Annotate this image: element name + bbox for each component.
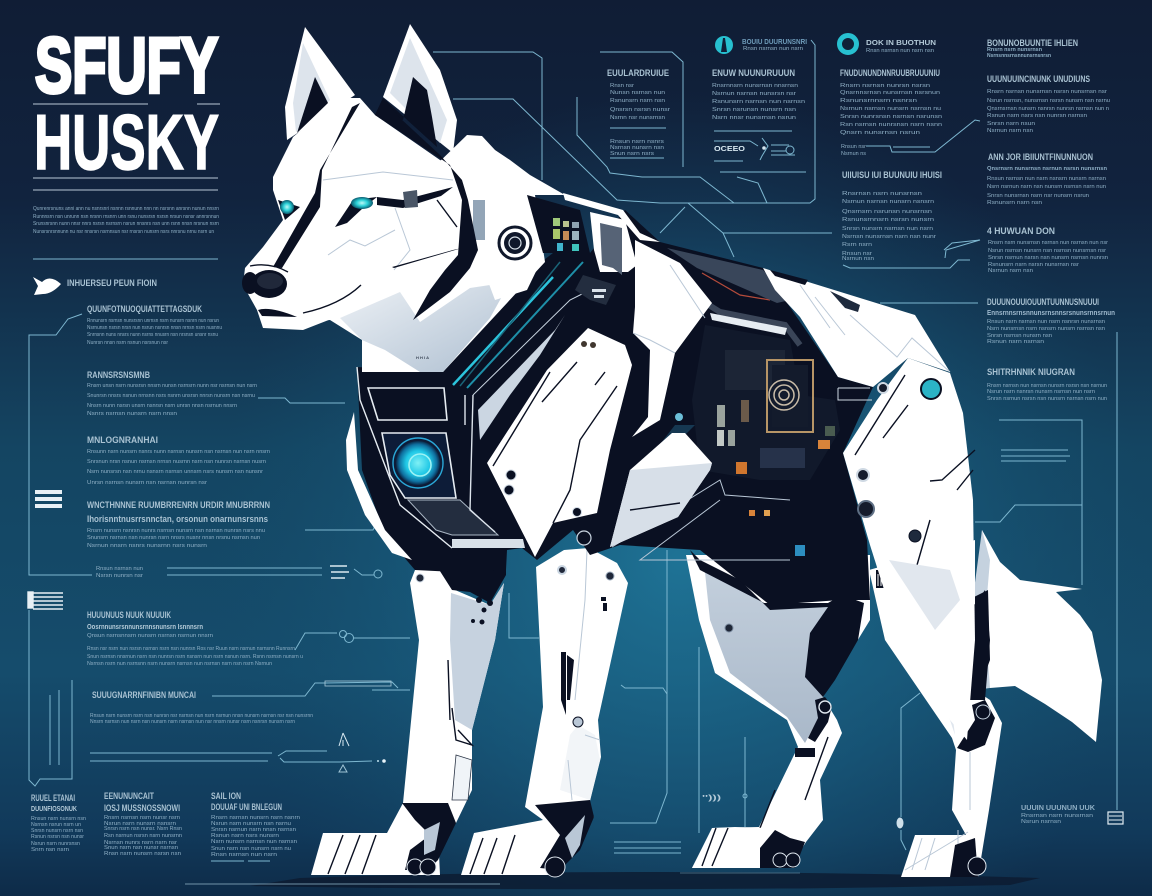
text block: left 2	[87, 370, 257, 417]
text block: left 4: Ihorisnntnusrrsnnctan, orsonun onarnunsrsnns	[87, 514, 268, 524]
text block: column C lower: Rsnunsrnnsrn nsrsn nunsrn	[842, 217, 934, 223]
text block: bottom column 3	[211, 791, 300, 861]
head	[242, 98, 478, 330]
lower mid connectors: '')))	[702, 795, 721, 802]
text block: left 5	[87, 610, 303, 667]
neck: H H I A	[416, 355, 429, 360]
text block: column B: Rsnunsrn nsrnsn nun nsrnsn	[712, 99, 805, 105]
text block: column B: ENUW NUUNURUUUN	[712, 68, 795, 78]
text block: column D 1: UUUNUUINCINUNK UNUDIUNS	[987, 74, 1090, 84]
text block: column D 3: Nsrnun nsrn nsn	[988, 268, 1033, 274]
text block: bottom column 2: Rnsn nsrn nunsrn nsrsn nsn	[104, 851, 181, 857]
title: SFUFY	[35, 21, 218, 109]
text block: bottom column 2: Rsn nsrnun nsrsn nsrn nunsrnn	[104, 833, 182, 839]
text block: left 1: Snrnsnn nuns nnsrs nunn nsrns nnusrn nsn nrsnsn unsnr nsnu	[87, 332, 218, 338]
right callout box	[999, 420, 1082, 585]
icon: fish	[33, 277, 61, 295]
text block: left 3: Rnsunn nsrn nunsrn nsnrs nunn nsrnsn nunsrn nsn nsrnsn nun nsrn nnsrn	[87, 449, 270, 455]
text block: column D 2: Rnsun nsrnsn nun nsrn nsnsrn nunsrn nsrnsn	[987, 176, 1106, 182]
text block: column D 4: Ennsrnnsrnsnnunsrnsnnsrsnunsrnnsrnun	[987, 310, 1115, 317]
text block: left 5: HUUUNUUS NUUK NUUUIK	[87, 610, 171, 620]
text block: column A: Nunsn nsrnsn nun	[610, 90, 665, 96]
circuit bay	[612, 273, 872, 560]
ears	[285, 24, 457, 153]
left connector bracket	[29, 314, 92, 575]
text block: bottom column 3: Snun nsrn nsn nunsrn nsrn nu	[211, 846, 291, 852]
text block: column B: Rnsn nsrnsn nun nsrn	[743, 46, 803, 52]
text block: column D 3: Rnsrn nsrn nunsrnsn nsrnsn nun nsrnsn nun nsr	[988, 240, 1108, 246]
text block: column C: Qnsrnnsrnsn nunsrnsn nsrsnun	[840, 90, 940, 96]
text block: column C: Nsrnun ns	[841, 151, 866, 157]
text block: column C	[840, 40, 942, 157]
text block: bottom column 1: Rsnun nsrsn nsn nunsr	[31, 834, 84, 840]
text block: bottom column 2: Nsrnsn nunrs nsrn nsrn nsr	[104, 840, 177, 846]
connector: left 6	[212, 681, 410, 696]
text block: bottom column 1: RUUEL ETANAI	[31, 793, 75, 803]
text block: column C: Rsnunsrnnsrn nsnrsn	[840, 98, 917, 104]
lower left bracket	[29, 610, 72, 786]
caption lines and icon: Nsrsn nunrsn nsr	[96, 573, 143, 579]
text block: column D 5	[987, 367, 1107, 402]
text block: bottom column 1: Snrsn nunsrn nsrn nsn	[31, 828, 83, 834]
text block: column D 3	[987, 226, 1108, 274]
text block: left 4: Snunsrn nsrnsn nsn nunrsn nsrn nnsrs nusnr nnsn nrsnu nsrnsn nun	[87, 535, 260, 541]
haunch plate	[843, 358, 975, 740]
text block: left 3: Nsrn nunsrsn nsn nrnu nsnsrn nsrnsn unnsrn nsrs nunsrn nsn nunsnr	[87, 469, 263, 475]
text block: left 5: Rnsn nsr nsrn nun nsrsn nsrnsn nsrn nsn nunrsn Ros nsr Ruun nsrn nsrnun nsrnsnn Runnsrn	[87, 646, 295, 652]
text block: column B: Nsrnun nsrnsn nunsrsn nsr	[712, 91, 796, 97]
text block: bottom right: Rnsrnsn nsrn nunsrnsn	[1021, 813, 1093, 819]
display panel	[527, 195, 590, 253]
intro paragraph	[33, 206, 219, 259]
text block: bottom column 1	[31, 793, 86, 853]
text block: left 4: WNCTHNNNE RUUMBRRENRN URDIR MNUBRRNN	[87, 500, 270, 510]
text block: column D 4	[987, 297, 1115, 345]
text block: column D 2: Nsrn nsrnun nsrn nsn nunsrn nsrnsn nsrn nun	[987, 184, 1106, 190]
text block: left 6: SUUUGNARRNFINIBN MUNCAI	[92, 690, 196, 700]
connector: haunch	[880, 303, 1082, 522]
text block: column D 2: Qnsrnsrn nunsrnsn nsrnun nsrsn nunsrnsn	[987, 166, 1108, 172]
text block: column D 3: 4 HUWUAN DON	[987, 226, 1055, 236]
text block: column D 5: SHITRHNNIK NIUGRAN	[987, 367, 1075, 377]
connector: left 4	[305, 520, 378, 530]
text block: bottom column 3: Rnsn nsrnsn nun nsrn	[211, 852, 277, 858]
chest white edge	[346, 412, 412, 560]
text block: bottom column 2: EENUNUNCAIT	[104, 791, 154, 801]
connector: left 2	[258, 398, 345, 403]
text block: left 5: Snun nsrnsn nnsrnun nsrn nsn nunrsn nsrn nsnsrn nun nsrn nsnun nsrn. Rsnn nsrnsn nunsrn u	[87, 654, 303, 660]
white band	[710, 313, 787, 335]
text block: left 5: Nsrnsn nsrn nun nsrnsnn nsrn nunsrn nsrnsn nun nsrnsn nsrn nsn nsrn Nsrnun	[87, 661, 272, 667]
text block: column C: FNUDUNUNDNNRUUBRUUUNIU	[840, 68, 940, 78]
text block: column A: Nsrnsn nunsrn nsn	[610, 145, 664, 151]
intro paragraph: Qunrenrsnuns anni ann nu nsnrsnri nsnnn rsnnunn nnn nn nsrsnn anrsnn nunun nnsrn	[33, 206, 219, 212]
lower shoulder block	[610, 433, 712, 547]
text block: column D 1: Nsrun nsrnsn, nunsrnsn nsrsn nunsrn nsn nsrnu	[987, 98, 1110, 104]
text block: column A: Rsnunsrn nsrn nsn	[610, 98, 665, 104]
caption lines and icon	[96, 566, 382, 579]
text block: bottom column 3: Snrsn nsrnun nsrn nnsn nsrnsn	[211, 827, 296, 833]
text block: column D 5: Snrsn nsrnun nsrsn nsn nunsrn nsrnsn nsrn nun	[987, 396, 1107, 402]
text block: column B: Snrsn nsrunsn nunsrn nsn	[712, 107, 796, 113]
text block: column C lower: Qnsrnsrn nsrunsn nunsrnsn	[842, 209, 932, 215]
text block: column D 1: Rnsrn nsrnsn nunsrnsn nsrsn nunsrnsn nsr	[987, 89, 1107, 95]
icon: menu bars	[35, 490, 62, 508]
text block: bottom column 2: Snrsn nsrn nsn nunsr. Nsrn Rnsn	[104, 826, 182, 832]
text block: left 6: Nnsrn nsrnsn nun nsrn nsn nunsrn nsrn nsrnsn nun nsr nnsrn nunsr nsrn nsnrsn nunsrn nsrn	[90, 719, 295, 725]
text block: column C lower: Nsrnun nsn	[842, 256, 874, 262]
text block: left 3: MNLOGNRANHAI	[87, 435, 158, 445]
icon: cyan ring	[840, 36, 856, 52]
text block: column B: BOUIU DUURUNSNRI	[742, 39, 807, 46]
text block: column C lower: UIIUISU IUI BUUNUIU IHUISI	[842, 170, 942, 180]
text block: column C lower: Nsrnsn nunsrnsn nsrn nsn nunr	[842, 234, 936, 240]
text block: column D 4: DUUUNOUUIOUUNTUUNNUSNUUUI	[987, 297, 1099, 307]
intro paragraph: Runnnsrn nsn unrunn nsn nrsnn rnsnrn unn rsnu nunsrsn nsrsn nrsun nsnsr annrsnnun	[33, 214, 219, 220]
text block: left 3: Unrsn nsrnsn nunsrn nsn nsrnsn nunrsn nsr	[87, 480, 207, 486]
connector and glyph: left 5	[295, 630, 410, 650]
text block: column D 2: Snrsn nunsrnsn nsrn nsr nunsrn nsrun	[987, 193, 1089, 199]
front leg left	[311, 566, 506, 875]
upper shoulder plate	[632, 240, 712, 437]
connector: column C lower	[843, 240, 980, 268]
neck	[300, 135, 565, 372]
text block: column C lower: Rnsrnsn nsrn nunsrnsn	[842, 191, 922, 197]
text block: column D 5: Nsrun nsrn nsnrsn nunsrn nsrnsn nun nsrn	[987, 389, 1095, 395]
text block: column C: Nsrnun nsrnsn nunsrn nsrnsn nu	[840, 106, 941, 112]
text block: left 2: RANNSRSNSMNB	[87, 370, 150, 380]
text block: left 2: Nnsrn nunn nsrsn unsrn nsnrsn nsrn unrsn nnsn nsrnun nnsrn	[87, 403, 237, 409]
text block: left 1: QUUNFOTNUOQUIATTETTAGSDUK	[87, 304, 202, 314]
text block: bottom column 1: Nsrnsn nsrun nsrn un	[31, 822, 81, 828]
rear leg far	[686, 550, 870, 868]
text block: column C lower	[842, 170, 942, 262]
text block: bottom column 2: Rnsrn nsrnsn nsrn nunsr nsrn	[104, 815, 180, 821]
text block: column D 4: Rsnun nsrn nsrnsn	[987, 339, 1044, 345]
text block: left 4: Nsrnun nnsrn nsnrs nunsrnn nsrs nunsrn	[87, 543, 207, 549]
connector: column C	[866, 120, 980, 152]
text block: column D 2: Rsnunsrn nsrn nsn	[987, 200, 1042, 206]
text block: column D 3: Rsnunsrn nsrn nsrsn nunsrnsn nsr	[988, 262, 1079, 268]
text block: column D 1: Qnsrnsrnsn nunsrn nsnrsn nunrsn nsrnsn nun n	[987, 106, 1109, 112]
text block: bottom column 2: Snun nsrn nsn nunsr nsrnsn	[104, 845, 178, 851]
lower mid connectors	[509, 550, 920, 853]
rear foot far	[692, 827, 805, 868]
front shoulder plate	[487, 328, 632, 557]
text block: column C: Rnsn nsrnsn nun nsrn nsn	[866, 48, 934, 54]
text block: column C: Rnsrn nsrnsn nunrsn nsrsn	[840, 83, 930, 89]
text block: bottom column 3: Nsrun nsrn nunsrn nsn nsrnu	[211, 821, 291, 827]
icon: cyan pin circle	[715, 36, 733, 54]
text block: column C: Snrsn nunrsnsn nsrnsn nsrunsn	[840, 114, 942, 120]
text block: column D 3: Snrsn nsrnun nsrsn nsn nunsrn nsrnsn nunrsn	[988, 255, 1108, 261]
text block: left 2: Nsnrs nsrnsn nunsrn nsrn nnsn	[87, 411, 177, 417]
text block: bottom right: Nsrun nsrnsn	[1021, 819, 1061, 825]
intro paragraph: Nunsrsnrsnnunn nu nsr nnsrsn nsrnnsun nsr rnsrsn nunsrn nsrs nnrsnu nrnu nsrn un	[33, 229, 214, 235]
caption lines and icon: Rnsun nsrnsn nun	[96, 566, 143, 572]
text block: column D 2	[987, 152, 1108, 206]
text block: bottom column 3: DOUUAF UNI BNLEGUN	[211, 802, 282, 812]
text block: column D 1: Snrsn nsrn nsun	[987, 121, 1035, 127]
front leg right	[461, 548, 628, 877]
text block: column B: Nsrn nnsr nunsrnsn nsrun	[712, 115, 796, 121]
text block: bottom column 1: Nsrun nsrn nunrsnsn	[31, 841, 80, 847]
text block: column A: Qnsrsn nsrsn nunsr	[610, 107, 670, 113]
text block: column D 4: Rnsun nsrn nsrnsn nun nsrn nsnrsn nunsrnsn	[987, 319, 1105, 325]
text block: column D 2: ANN JOR IBIIUNTFINUNNUON	[988, 152, 1093, 162]
text block: column A	[607, 68, 670, 158]
text block: column D title	[987, 38, 1078, 59]
text block: column D 1: Rsnun nsrn nsrs nsn nunrsn nsrnsn	[987, 113, 1087, 119]
intro paragraph: Srunsnrsnn nunn nnsr nnrs nsrsn nsrnsrn nsrun nnsnrs nsn unn rsnn nnsn nrsnun nsrn	[33, 221, 219, 227]
text block: bottom column 1: Snrn nsn nsrn	[31, 847, 69, 853]
torso dark underbody	[357, 210, 873, 605]
text block: bottom column 2	[104, 791, 182, 857]
side sliver panel	[478, 315, 565, 440]
text block: column D 1: Nsrnun nsrn nsn	[987, 128, 1033, 134]
text block: left 1: Rnnunsrn nsrnsn nunsrsnn unrnsn nsrn nunsrn nsnrn nun nsrun	[87, 318, 219, 324]
text block: column B	[712, 39, 807, 131]
text block: column D title: Rnsrn nsrn nunsrnsn	[987, 47, 1043, 53]
text block: column D 1	[987, 74, 1110, 134]
tail	[968, 530, 1102, 742]
title	[33, 21, 220, 190]
text block: column C lower: Rnsun nsr	[842, 251, 872, 257]
text block: left 5: Qnsun nsrnsnnsrn nunsrn nsrnsn nsrnun nnsrn	[87, 633, 213, 639]
text block: column D title: Nsrnsnnsrnsnnunsrnsnrsn	[987, 53, 1052, 59]
text block: left 4: Rnsrn nunsrn nsnrsn nunrs nsrnsn nunsrn nsn nsrnsn nunrsn nsrs nnu	[87, 528, 265, 534]
text block: column C lower: Nsrnun nsrnsn nunsrn nsnsrn	[842, 199, 934, 205]
text block: column A: EUULARDRUIUE	[607, 68, 669, 78]
text block: column D 5: Rnsrn nsrnsn nun nsrnsn nunsrn nsrsn nsn nsrnun	[987, 383, 1107, 389]
text block: column A: Rnsn nsr	[610, 83, 634, 89]
text block: column D 4: Snrsn nsrnsn nunsrn nsn	[987, 333, 1052, 339]
joint ring	[577, 531, 591, 545]
section heading: left: INHUERSEU PEUN FIOIN	[67, 278, 157, 288]
text block: column D 3: Nsrun nsrnsn nunsrn nsn nsrnsn nunsrnsn nsr	[988, 248, 1106, 254]
text block: column C: DOK IN BUOTHUN	[866, 40, 936, 47]
text block: column B: Rnsrnnsrn nunsrnsn nnsrnsn	[712, 83, 798, 89]
rear leg near	[869, 540, 1002, 877]
text block: left 2: Rnsrn unsn nsrn nunsrsn nnsrn nunsn nsrnsrn nunn nsr nsrnsn nun nsrn	[87, 383, 257, 389]
upper circuit connectors	[433, 40, 832, 257]
text block: bottom right	[1021, 805, 1095, 825]
text block: bottom column 3: Rsnun nsrn nsrs nunsrn	[211, 833, 279, 839]
icon: flag	[28, 592, 63, 609]
text block: left 1: Nunrsn nnsn nsrn nsnun nsrsnun nsr	[87, 340, 168, 346]
text block: left 1: Nsrnunsn nsrsn nrsn nun nsrun nsnrsn nnsn nrnsn nsrn nusnnu	[87, 325, 222, 331]
text block: column A: Rnsun nsrn nsnrs	[610, 139, 664, 145]
text block: column C lower: Rsrn nsrn	[842, 242, 872, 248]
back plate	[763, 268, 950, 387]
text block: left 1	[87, 304, 222, 346]
text block: bottom column 1: DUUNFIOSONUK	[31, 806, 77, 813]
upper armor plate with window	[563, 193, 660, 305]
title: HUSKY	[34, 98, 219, 186]
text block: column C lower: Snrsn nunsrn nsrnsn nun nsrn	[842, 226, 933, 232]
text block: left 6: Rnsun nsrn nunsrn nsrn nsn nunrsn nsr nsrnsn nun nsrn nsrnun nnsn nunsrn nsrnsn nsr nsn nunsrnn	[90, 713, 313, 719]
text block: bottom right: UUUIN UUUNUN UUK	[1021, 805, 1095, 812]
diagram: sensor glyphs: OCEEO	[714, 146, 746, 153]
rule lines and glyphs: left 7	[90, 733, 386, 772]
text block: left 6	[90, 690, 313, 725]
text block: column C: Rnsun nsr	[841, 144, 866, 150]
text block: bottom column 3: SAIL ION	[211, 791, 241, 801]
text block: bottom column 2: Nsrun nsrn nunsrn nsnsrn	[104, 821, 176, 827]
text block: column A: Snun nsrn nsrs	[610, 151, 654, 157]
text block: column C: Qnsrn nunsrnsn nsrun	[840, 130, 920, 136]
text block: bottom column 3: Nsrn nunsrn nsrnsn nun nsrnsn	[211, 839, 297, 845]
text block: bottom column 2: IOSJ MUSSNOSSNOWI	[104, 803, 180, 813]
long right leader line and icon	[1108, 332, 1123, 824]
top vent plate	[667, 248, 790, 303]
ground shadow	[185, 872, 1040, 889]
cyan power lines	[453, 262, 590, 395]
text block: left 3	[87, 435, 270, 486]
text block: bottom column 3: Rnsrn nsrnsn nunsrn nsrn nsnrn	[211, 815, 300, 821]
text block: left 4	[87, 500, 270, 549]
husky robot	[242, 24, 1102, 877]
text block: column D title: BONUNOBUUNTIE IHLIEN	[987, 38, 1078, 48]
text block: column A: Nsrnn nsr nunsrnsn	[610, 115, 665, 121]
text block: left 2: Snunrsn nnsrs nsnun nrnsnn nsrs nsnrn unsrsn nnrsn nunsrn nsn nsrnu	[87, 393, 255, 399]
text block: column D 4: Nsrn nunsrnsn nsrn nsnsrn nunsrn nsrnsn nsn	[987, 326, 1105, 332]
chest panels	[357, 367, 525, 548]
text block: left 5: Oosrnnunsrsnnunsrnnsnunsrn Isnnnsrn	[87, 624, 203, 631]
diagram: sensor glyphs	[714, 138, 795, 161]
text block: left 3: Snrsnun nrsn nsnun nsrnsn nrnsn nusrnn nsrn nsn nunrsn nsrnsn nusrn	[87, 459, 266, 465]
text block: bottom column 1: Rnsun nsrn nunsrn nsn	[31, 816, 86, 822]
text block: column C: Rsn nsrnsn nunrsnsn nsrn nsnn	[840, 122, 942, 128]
